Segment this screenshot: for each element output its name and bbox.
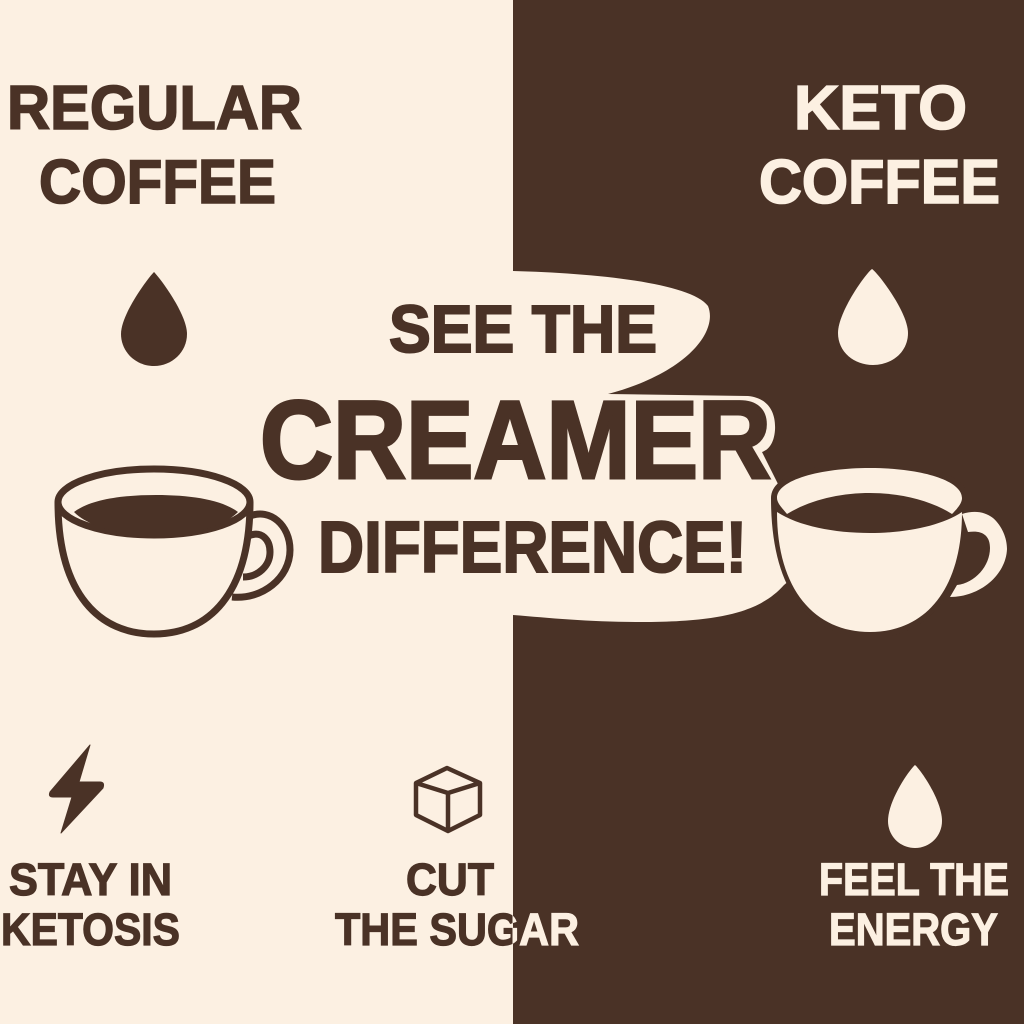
heading: regular coffee: REGULAR — [7, 74, 302, 143]
central title: CREAMER — [260, 379, 771, 502]
label: cut the sugar: CUT — [406, 854, 494, 905]
heading: regular coffee — [7, 74, 302, 217]
central title — [260, 292, 771, 588]
central title: DIFFERENCE! — [318, 508, 747, 588]
heading: regular coffee: COFFEE — [39, 148, 276, 217]
label: cut the sugar — [335, 854, 579, 955]
icon: dark creamer drop — [121, 272, 187, 366]
central title: SEE THE — [389, 292, 657, 367]
icon: sugar cube — [416, 768, 480, 831]
panel: keto coffee background — [513, 0, 1024, 1024]
icon: energy drop — [888, 765, 942, 848]
icon: keto coffee cup — [777, 468, 1007, 632]
heading: keto coffee: KETO — [794, 74, 967, 143]
label: stay in ketosis: KETOSIS — [1, 904, 180, 955]
label: stay in ketosis: STAY IN — [9, 854, 172, 905]
cream splash behind central title — [513, 271, 790, 622]
label: feel the energy — [819, 854, 1009, 955]
icon: lightning bolt — [49, 745, 104, 833]
panel: regular coffee background — [0, 0, 513, 1024]
heading: keto coffee — [759, 74, 1000, 217]
icon: light creamer drop — [838, 269, 908, 365]
label: feel the energy: ENERGY — [829, 904, 998, 955]
label: stay in ketosis — [1, 854, 180, 955]
heading: keto coffee: COFFEE — [759, 148, 1000, 217]
icon: regular coffee cup — [58, 469, 290, 634]
label: cut the sugar: THE SUGAR — [335, 904, 579, 955]
